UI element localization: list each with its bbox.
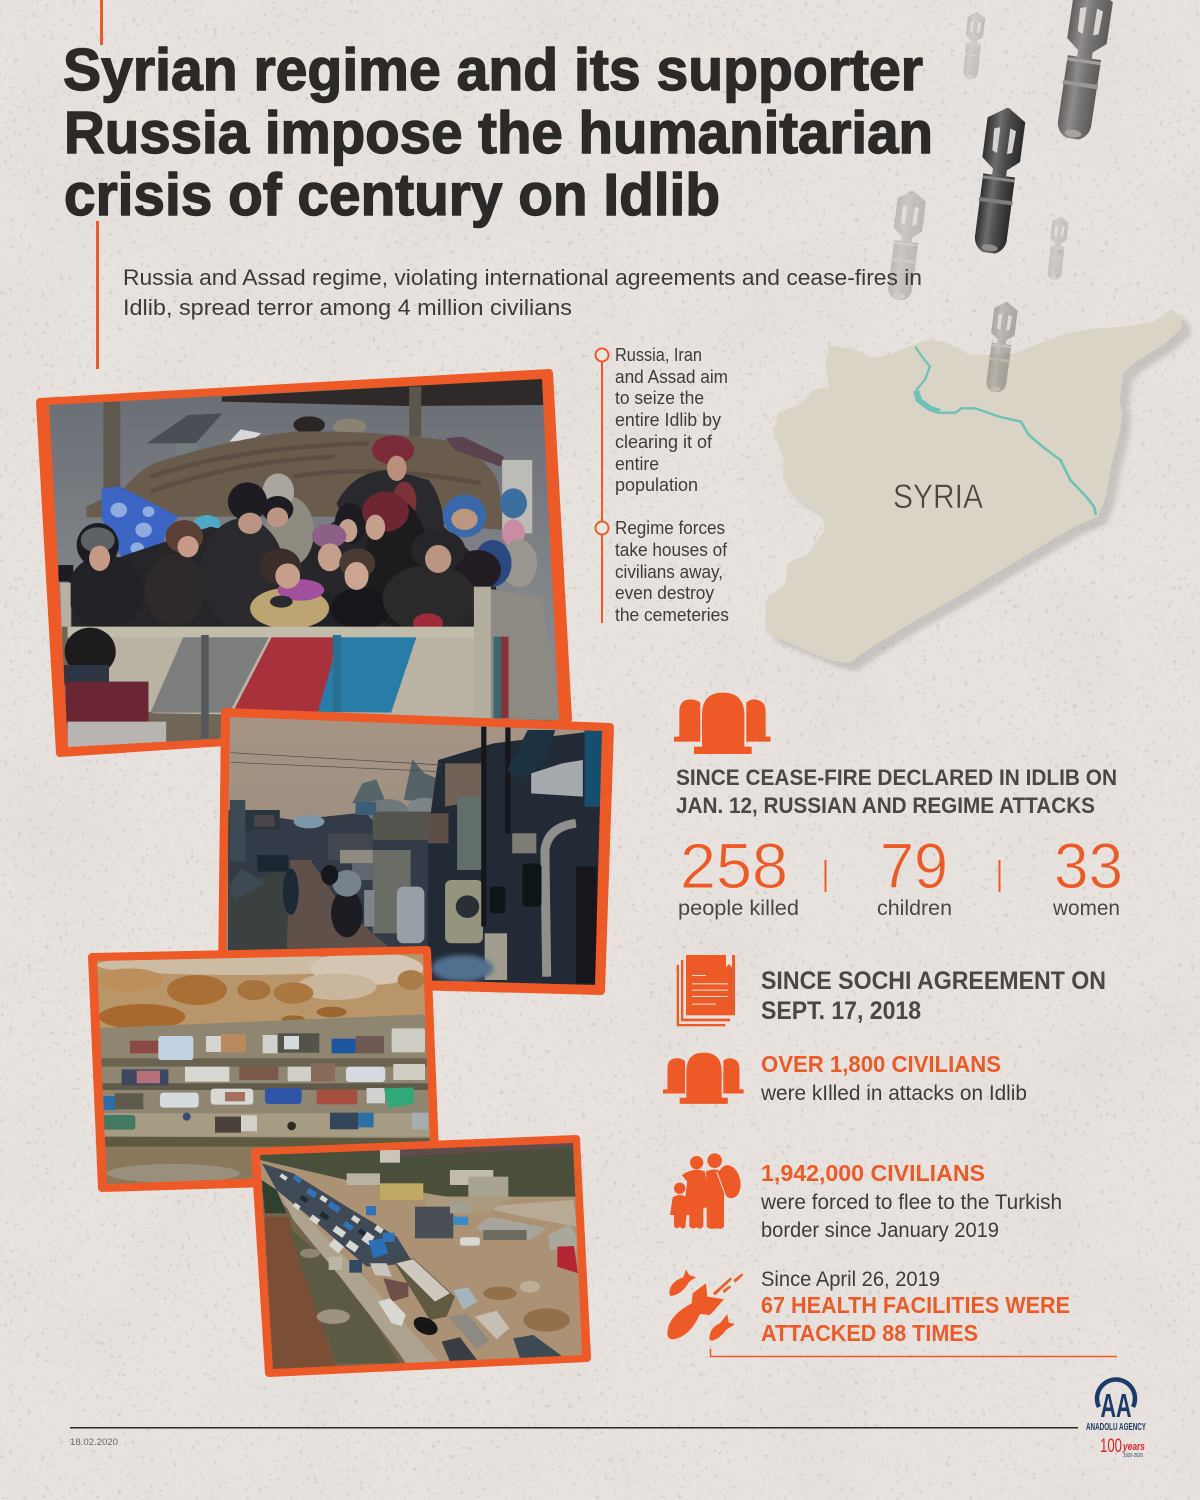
logo: Anadolu Agency 100 years: ANADOLU AGENCY xyxy=(1086,1422,1146,1433)
stat: 258 people killed: 258 xyxy=(680,830,788,902)
subtitle with accent line: Russia and Assad regime, violating international agreements and cease-fires in xyxy=(123,265,922,290)
timeline notes: the cemeteries xyxy=(615,605,729,625)
stat: 33 women: women xyxy=(1052,897,1120,920)
stat: 1,942,000 civilians: were forced to flee to the Turkish xyxy=(760,1191,1062,1214)
photo 3: aerial view of vehicles in rows xyxy=(90,950,437,1190)
icon: documents xyxy=(677,955,735,1026)
stat: health facilities attacked: ATTACKED 88 TIMES xyxy=(761,1320,978,1346)
title: Russia impose the humanitarian xyxy=(64,100,933,166)
heading: cease-fire attacks xyxy=(676,765,1117,818)
photo 1: children on a truck xyxy=(36,369,572,757)
stat: over 1,800 civilians: were kIlled in attacks on Idlib xyxy=(760,1082,1027,1105)
title xyxy=(63,37,933,228)
logo: Anadolu Agency 100 years: 100 xyxy=(1100,1436,1122,1457)
icon: falling bombs xyxy=(667,1269,743,1341)
title: crisis of century on Idlib xyxy=(64,162,720,228)
stat: 1,942,000 civilians: 1,942,000 CIVILIANS xyxy=(761,1160,985,1186)
subtitle with accent line: Idlib, spread terror among 4 million civilians xyxy=(123,295,572,320)
timeline notes: Russia, Iran xyxy=(615,345,702,365)
bomb over the map xyxy=(984,300,1019,393)
stat: health facilities attacked: Since April 26, 2019 xyxy=(761,1268,940,1291)
vehicles row 2 xyxy=(122,1063,425,1085)
stat: 79 children: children xyxy=(877,897,952,920)
timeline notes: take houses of xyxy=(615,540,728,560)
heading: Sochi agreement: SINCE SOCHI AGREEMENT ON xyxy=(761,967,1106,995)
vehicles row 4 xyxy=(103,1113,428,1133)
heading: cease-fire attacks: SINCE CEASE-FIRE DECLARED IN IDLIB ON xyxy=(676,765,1117,790)
photo 4: aerial view of congested road xyxy=(247,1139,593,1380)
Euphrates river xyxy=(915,347,1096,515)
stat: health facilities attacked xyxy=(761,1268,1070,1346)
subtitle with accent line xyxy=(96,221,922,369)
stat: 79 children: 79 xyxy=(880,830,948,902)
timeline notes: civilians away, xyxy=(615,562,723,582)
logo: Anadolu Agency 100 years: AA xyxy=(1100,1387,1132,1424)
timeline notes: and Assad aim xyxy=(615,367,728,387)
timeline notes: to seize the xyxy=(615,388,704,408)
stat: over 1,800 civilians: OVER 1,800 CIVILIANS xyxy=(761,1051,1001,1077)
logo: Anadolu Agency 100 years: years xyxy=(1122,1441,1145,1453)
stat: 1,942,000 civilians: border since January 2019 xyxy=(761,1219,999,1242)
vehicles row 1 xyxy=(130,1028,425,1060)
icon: tombstones small xyxy=(663,1053,744,1104)
timeline notes xyxy=(596,345,729,625)
timeline notes: clearing it of xyxy=(615,432,713,452)
timeline notes: entire Idlib by xyxy=(615,410,721,430)
vehicles row 3 xyxy=(103,1087,414,1110)
logo: Anadolu Agency 100 years xyxy=(1086,1380,1146,1459)
stat: 258 people killed: people killed xyxy=(678,897,799,920)
icon: tombstones xyxy=(674,693,771,754)
stat: 33 women: 33 xyxy=(1054,830,1123,902)
stat: over 1,800 civilians xyxy=(760,1051,1027,1105)
photo 2: convoy of trucks on a dusty road xyxy=(222,712,610,991)
stat: 1,942,000 civilians xyxy=(760,1160,1062,1242)
timeline notes: even destroy xyxy=(615,583,714,603)
map label: SYRIA: SYRIA xyxy=(893,478,983,516)
map of Syria xyxy=(766,309,1190,671)
decorative title accent xyxy=(100,0,103,45)
title: Syrian regime and its supporter xyxy=(63,37,923,103)
falling bombs illustration xyxy=(885,0,1115,301)
date: 18.02.2020 xyxy=(70,1437,118,1448)
timeline notes: population xyxy=(615,475,698,495)
icon: fleeing family xyxy=(670,1153,744,1229)
heading: cease-fire attacks: JAN. 12, RUSSIAN AND REGIME ATTACKS xyxy=(676,793,1095,818)
timeline notes: entire xyxy=(615,454,659,474)
stat: health facilities attacked: 67 HEALTH FACILITIES WERE xyxy=(761,1292,1070,1318)
heading: Sochi agreement xyxy=(761,967,1106,1025)
timeline notes: Regime forces xyxy=(615,518,725,538)
heading: Sochi agreement: SEPT. 17, 2018 xyxy=(761,997,921,1025)
logo: Anadolu Agency 100 years: 1920-2020 xyxy=(1123,1453,1143,1459)
